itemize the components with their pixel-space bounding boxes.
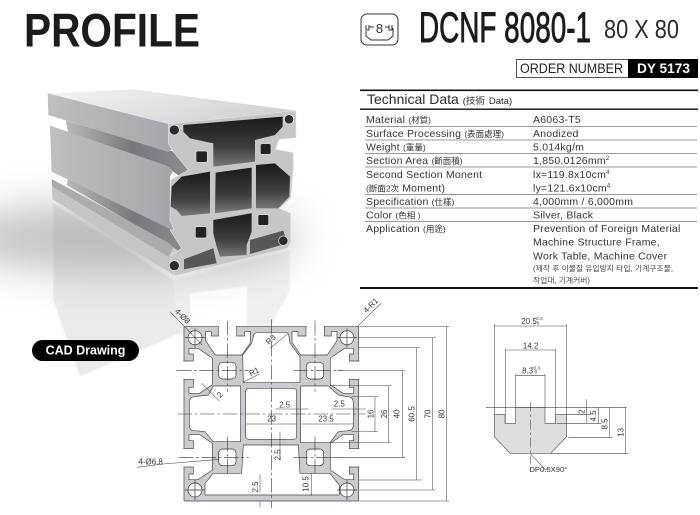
dimension labels: 8.3	[522, 366, 534, 375]
row values: 1,850.0126mm	[533, 155, 606, 167]
CAD cross-section drawing	[137, 296, 449, 508]
dimension labels: +0.3	[531, 365, 540, 370]
T-slots	[183, 326, 359, 480]
dimension labels: 0	[535, 370, 538, 375]
right-hand dimension labels: 60.5	[407, 406, 416, 422]
profile outer body	[184, 327, 359, 501]
dimension labels: 14.2	[523, 341, 539, 350]
row values: 5.014kg/m	[533, 142, 584, 154]
inner dimension labels: 2.5	[274, 449, 283, 461]
corner holes	[185, 328, 357, 500]
row values: Work Table, Machine Cover	[533, 250, 668, 262]
technical data table	[360, 90, 698, 289]
order number box: ORDER NUMBER	[520, 60, 623, 76]
screw squares	[195, 144, 271, 238]
3D aluminium profile render	[48, 89, 296, 377]
right-hand dimension labels: 80	[438, 409, 447, 418]
dimension labels: 8.5	[600, 418, 609, 430]
bottom cavity	[213, 213, 252, 257]
row values: Silver, Black	[533, 210, 594, 222]
centre cavity	[215, 168, 252, 213]
lower slot details	[184, 248, 217, 269]
row values: Machine Structure Frame,	[533, 236, 660, 248]
dimension labels	[521, 316, 625, 474]
corner holes	[169, 115, 294, 271]
middle side face	[50, 126, 174, 231]
floor shadow	[0, 202, 300, 274]
row labels: Material (材質)	[366, 114, 431, 126]
screw holes	[219, 362, 324, 466]
internal cavities	[189, 332, 353, 495]
row values: 4	[606, 170, 610, 176]
left cavity	[171, 172, 210, 216]
row labels	[366, 114, 504, 235]
row values: (제작 후 이물질 유입방지 타입, 기계구조물,	[533, 263, 673, 273]
dimension labels: 2	[577, 409, 586, 414]
right-hand dimension labels: 40	[392, 409, 401, 418]
row values	[533, 114, 681, 285]
inner dimension labels: R1	[248, 365, 261, 378]
inner dimension labels: 4-Ø6.8	[138, 457, 163, 466]
lower side face	[52, 179, 175, 276]
product name: DCNF 8080-1	[419, 4, 591, 52]
inner dimension labels: 23.5	[318, 415, 334, 424]
upper side face	[48, 93, 174, 152]
top face	[48, 89, 296, 124]
title: PROFILE	[24, 4, 200, 56]
inner dimension labels: 2.5	[334, 400, 345, 409]
row values: ly=121.6x10cm	[533, 182, 607, 194]
top cavity	[183, 117, 283, 167]
upper slot recess	[66, 121, 200, 177]
T-slot detail drawing	[486, 316, 628, 474]
CAD Drawing badge: CAD Drawing	[46, 344, 125, 358]
product icon	[361, 14, 398, 45]
dimension labels: +0.3	[533, 316, 543, 321]
row values: lx=119.8x10cm	[533, 169, 606, 181]
table heading: Technical Data (技術 Data)	[367, 91, 512, 107]
front face	[168, 111, 296, 276]
inner dimension labels: 4-R1	[362, 296, 381, 315]
row values: 2	[606, 156, 610, 162]
inner dimension labels: R3	[264, 332, 278, 346]
row values: Anodized	[533, 128, 579, 140]
dimension labels: 4.5	[589, 410, 598, 422]
right-hand dimension labels: 16	[366, 409, 375, 418]
lower slot recess	[67, 177, 200, 257]
row labels: Second Section Monent	[366, 169, 482, 181]
inner dimension labels	[138, 296, 381, 493]
centre lines	[177, 319, 365, 508]
inner dimensions	[137, 303, 382, 507]
right-hand dimension labels: 26	[380, 409, 389, 418]
row labels: Section Area (斷面積)	[366, 155, 463, 167]
size label: 80 X 80	[604, 14, 679, 44]
row values: 4	[607, 184, 611, 190]
right cavity	[256, 163, 290, 208]
dimension labels: 20.5	[521, 317, 537, 326]
dimension lines	[486, 324, 628, 469]
inner dimension labels: 23	[267, 415, 277, 424]
floor reflection	[53, 203, 290, 377]
inner dimension labels: 2	[215, 390, 225, 400]
dimension labels: 13	[616, 427, 625, 437]
order number box: DY 5173	[637, 60, 690, 76]
product icon: 8	[376, 21, 383, 36]
row labels: Color (色相 )	[366, 210, 421, 222]
row values: Prevention of Foreign Material	[533, 223, 681, 235]
order number box	[516, 59, 698, 78]
CAD Drawing badge	[32, 340, 139, 361]
inner dimension labels: 2.5	[279, 401, 291, 410]
row values: 4,000mm / 6,000mm	[533, 196, 633, 208]
row labels: Specification (仕樣)	[366, 196, 455, 208]
inner dimension labels: 4-Ø8	[173, 307, 192, 326]
row labels: (斷面2次 Moment)	[366, 182, 445, 194]
row values: 작업대, 기계커버)	[533, 275, 591, 285]
row labels: Application (用途)	[366, 223, 446, 235]
row labels: Weight (重量)	[366, 142, 426, 154]
inner dimension labels: 10.5	[302, 476, 311, 492]
right-hand dimension labels: 70	[424, 409, 433, 418]
slot section	[494, 407, 567, 453]
row values: A6063-T5	[533, 114, 581, 126]
inner dimension labels: 2.5	[251, 481, 260, 493]
row labels: Surface Processing (表面處理)	[366, 128, 504, 140]
right-hand dimension labels	[366, 406, 447, 422]
dimension labels: 0	[537, 321, 540, 326]
dimension labels: DP0.5X90°	[529, 465, 567, 474]
right-hand dimensions	[330, 327, 449, 501]
